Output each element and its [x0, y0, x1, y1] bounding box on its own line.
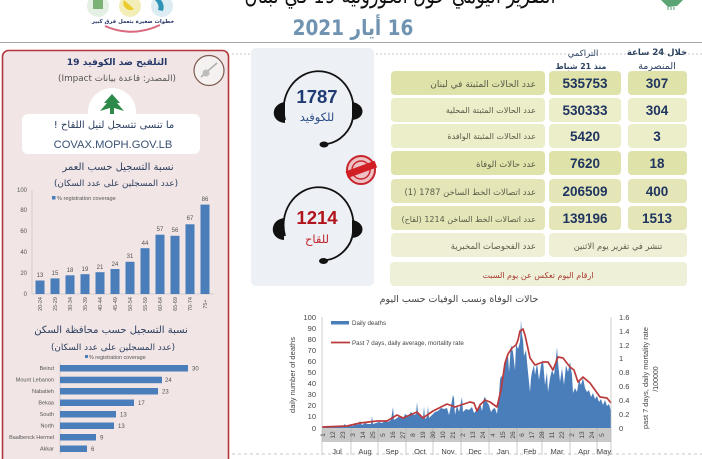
axes: 90 [308, 324, 316, 333]
table row: hotline 1214 calls: 1513 [642, 211, 673, 226]
bar chart: registration by age: 18 [67, 268, 74, 274]
axes: 10 [308, 412, 316, 421]
date tick labels [320, 431, 606, 439]
bar chart: registration by governorate: Bekaa [38, 400, 55, 406]
month labels: Dec [468, 447, 482, 456]
bar chart: registration by governorate: 17 [138, 401, 145, 407]
table row: local cases: عدد الحالات المثبتة المحلية [446, 105, 536, 115]
heading: age chart [54, 162, 178, 189]
campaign logos [87, 0, 174, 32]
bar chart: registration by age: 70-74 [188, 297, 194, 311]
axes: 20 [308, 401, 316, 410]
axes: daily number of deaths [288, 337, 297, 413]
axes: 40 [308, 379, 316, 388]
panel: vaccination [2, 50, 228, 459]
bar chart: registration by age: 86 [202, 197, 209, 203]
month labels: Oct [414, 447, 427, 456]
axes: 1.4 [619, 327, 629, 336]
bar chart: registration by age: 67 [187, 216, 194, 222]
month labels: Apr [578, 447, 590, 456]
note: saturday figures [390, 262, 687, 286]
table row: imported cases: 5420 [570, 129, 600, 144]
icon: syringe badge [194, 56, 224, 86]
bar chart: registration by governorate: 24 [165, 378, 172, 384]
date tick labels: 10 [440, 431, 447, 439]
date tick labels: 2 [569, 433, 576, 437]
icon: vaccine hotline headset: للقاح [305, 232, 329, 246]
icon: ministry logo top right [661, 0, 683, 10]
table row: lab tests [391, 233, 687, 257]
bar chart: registration by governorate: Mount Lebanon [16, 378, 54, 384]
bar chart: registration by age: 40-44 [98, 297, 104, 311]
table headers: المنصرمة [638, 61, 676, 72]
bar chart: registration by governorate: 13 [118, 424, 125, 430]
bar chart: registration by age: 20 [20, 271, 28, 277]
table headers: خلال 24 ساعة [627, 48, 687, 58]
table row: imported cases [391, 124, 687, 148]
bar chart: registration by age: 31 [127, 254, 134, 260]
heading: age chart: (عدد المسجلين على عدد السكان) [54, 179, 178, 189]
date tick labels: 8 [410, 433, 417, 437]
axes: 0.6 [619, 382, 629, 391]
table row: hotline 1787 calls [391, 179, 687, 203]
month labels: Aug [358, 447, 372, 456]
source note: (المصدر: قاعدة بيانات Impact) [58, 74, 176, 84]
month labels: Mar [551, 447, 564, 456]
axes: 30 [308, 390, 316, 399]
date tick labels: 11 [549, 431, 556, 438]
campaign logos: خطوات صغيرة بتعمل فرق كبير [91, 18, 174, 25]
table row: local cases: 304 [646, 103, 669, 118]
bar chart: registration by governorate: 13 [120, 412, 127, 418]
axes: 0 [619, 424, 623, 433]
bar chart: registration by age: 50-54 [128, 297, 134, 311]
bar chart: registration by age [17, 188, 214, 311]
legend [331, 320, 464, 347]
icon: covid hotline headset: للكوفيد [300, 110, 334, 125]
table row: confirmed cases: 307 [646, 76, 668, 91]
table headers [556, 48, 687, 72]
icon: vaccine hotline headset: 1214 [296, 207, 338, 228]
bar chart: registration by age: 56 [172, 228, 179, 234]
date tick labels: 17 [529, 431, 536, 439]
axes: 0.8 [619, 368, 629, 377]
area: daily deaths [322, 320, 611, 428]
table row: hotline 1214 calls: عدد اتصالات الخط الساخن 1214 (لقاح) [401, 215, 536, 224]
bar chart: registration by governorate: % registration coverage [89, 355, 146, 361]
month labels: Jan [497, 447, 509, 456]
date tick labels: 13 [579, 431, 586, 439]
date tick labels: 5 [380, 433, 387, 437]
date tick labels: 23 [340, 431, 347, 439]
month labels: Nov [441, 447, 455, 456]
date tick labels: 26 [510, 431, 517, 439]
bar chart: registration by age: 40 [20, 250, 28, 256]
registration callout [22, 114, 200, 154]
bar chart: registration by age: 65-69 [173, 297, 179, 311]
table row: deaths [391, 151, 687, 175]
table row: confirmed cases [391, 71, 687, 95]
heading: age chart: نسبة التسجيل حسب العمر [61, 162, 174, 173]
registration callout: COVAX.MOPH.GOV.LB [54, 139, 172, 151]
heading: governorate chart: نسبة التسجيل حسب محافظة السكن [34, 325, 188, 336]
legend: Past 7 days, daily average, mortality rate [352, 340, 464, 347]
legend: Daily deaths [352, 320, 386, 327]
date tick labels: 25 [370, 431, 377, 439]
date band [322, 428, 611, 455]
axes: past 7 days, daily mortality rate [641, 327, 650, 429]
bar chart: registration by age: 20-24 [38, 297, 44, 311]
icon: covid hotline headset: 1787 [296, 86, 338, 107]
table row: imported cases: 3 [653, 129, 661, 144]
bar chart: registration by governorate: Beirut [40, 366, 54, 372]
bar chart: registration by age: 24 [112, 262, 119, 268]
axes: 1.6 [619, 313, 629, 322]
axes: 0.2 [619, 410, 629, 419]
registration callout: ما تنسى تتسجل لنيل اللقاح ! [54, 120, 174, 131]
date tick labels: 15 [500, 431, 507, 439]
icon: free stamp [346, 156, 377, 184]
bar chart: registration by age: 25-29 [53, 297, 59, 311]
table row: hotline 1787 calls: 400 [646, 184, 668, 199]
bar chart: registration by age: 55-59 [143, 297, 149, 311]
bar chart: registration by governorate: South [40, 412, 54, 418]
bar chart: registration by governorate: Baalbenck Hermel [9, 435, 54, 441]
chart title: حالات الوفاة ونسب الوفيات حسب اليوم [380, 294, 538, 305]
axes: 1.2 [619, 341, 629, 350]
date tick labels: 5 [599, 433, 606, 437]
bar chart: registration by governorate: 6 [91, 447, 95, 453]
line: 7-day mortality rate [322, 329, 611, 427]
axes: 1 [619, 354, 623, 363]
month labels: May [597, 447, 611, 456]
heading: governorate chart [34, 325, 188, 353]
bar chart: registration by age: 0 [24, 292, 28, 298]
date tick labels: 16 [390, 431, 397, 439]
bar chart: registration by age: 21 [97, 265, 104, 271]
axes: 100 [303, 313, 316, 322]
icon: cedar logo [88, 88, 136, 136]
table row: confirmed cases: 535753 [562, 76, 608, 91]
bar chart: registration by governorate: Akkar [40, 446, 54, 452]
bar chart: registration by governorate: Nabatieh [32, 389, 54, 395]
bar chart: registration by age: 80 [20, 208, 28, 214]
axes: 0 [312, 424, 316, 433]
bar chart: registration by age: 75+ [203, 299, 209, 309]
date tick labels: 12 [330, 431, 337, 439]
bar chart: registration by age: 45-49 [113, 297, 119, 311]
table row: hotline 1214 calls: 139196 [562, 211, 608, 226]
table row: lab tests: تنشر في تقرير يوم الاثنين [574, 241, 663, 251]
chart: daily deaths and mortality rate [288, 313, 660, 456]
date tick labels: 24 [589, 431, 596, 439]
bar chart: registration by age: 30-34 [68, 297, 74, 311]
table headers: التراكمي [568, 49, 598, 59]
bar chart: registration by age: 19 [82, 267, 89, 273]
date tick labels: 4 [490, 433, 497, 437]
axes [288, 313, 660, 433]
note: saturday figures: ارقام اليوم تعكس عن يوم السبت [482, 271, 594, 280]
month labels: Feb [524, 447, 536, 456]
axes: 50 [308, 368, 316, 377]
bar chart: registration by governorate [9, 355, 199, 455]
month labels [332, 447, 611, 456]
date tick labels: 2 [460, 433, 467, 437]
panel title: التلقيح ضد الكوفيد 19 [67, 57, 167, 68]
bar chart: registration by age: 60-64 [158, 297, 164, 311]
table row: hotline 1214 calls [391, 206, 687, 230]
bar chart: registration by age: 60 [20, 229, 28, 235]
axes: 60 [308, 357, 316, 366]
bar chart: registration by governorate: North [41, 424, 54, 430]
date tick labels: 14 [360, 431, 367, 439]
table row: lab tests: عدد الفحوصات المخبرية [451, 242, 536, 252]
heading: governorate chart: (عدد المسجلين على عدد السكان) [51, 343, 175, 353]
table row: deaths: 18 [649, 156, 665, 171]
bar chart: registration by governorate: 23 [162, 390, 169, 396]
table row: local cases [391, 98, 687, 122]
table row: hotline 1787 calls: عدد اتصالات الخط الساخن 1787 (1) [405, 187, 536, 197]
date tick labels: 28 [539, 431, 546, 439]
date tick labels: 21 [450, 431, 457, 439]
bar chart: registration by age: 44 [142, 241, 149, 247]
axes: /100000 [653, 366, 660, 392]
table headers: منذ 21 شباط [556, 62, 607, 71]
date tick labels: 6 [519, 433, 526, 437]
date tick labels: 3 [350, 433, 357, 437]
bar chart: registration by age: 35-39 [83, 297, 89, 311]
date tick labels: 30 [430, 431, 437, 439]
date tick labels: 22 [559, 431, 566, 439]
bar chart: registration by governorate: 9 [100, 436, 104, 442]
panel: hotlines [251, 48, 377, 286]
table row: confirmed cases: عدد الحالات المثبتة في لبنان [430, 80, 536, 90]
bar chart: registration by age: 15 [52, 271, 59, 277]
icon: covid hotline headset [274, 71, 362, 148]
bar chart: registration by age: 13 [37, 273, 44, 279]
date tick labels: 1 [320, 433, 327, 437]
table row: imported cases: عدد الحالات المثبتة الوافدة [447, 132, 536, 141]
date tick labels: 19 [420, 431, 427, 439]
icon: vaccine hotline headset [273, 187, 362, 264]
date tick labels: 24 [480, 431, 487, 439]
month labels: Sep [385, 447, 399, 456]
month labels: Jul [332, 447, 342, 456]
table row: hotline 1787 calls: 206509 [562, 184, 608, 199]
axes: 0.4 [619, 396, 629, 405]
table row: deaths: عدد حالات الوفاة [476, 160, 536, 170]
date: 16 أيار 2021 [293, 13, 413, 40]
bar chart: registration by governorate: 30 [192, 366, 199, 372]
date tick labels: 27 [400, 431, 407, 439]
bar chart: registration by age: 100 [17, 188, 28, 194]
table row: local cases: 530333 [562, 103, 608, 118]
table row: deaths: 7620 [570, 156, 600, 171]
date tick labels: 13 [470, 431, 477, 439]
axes: 80 [308, 335, 316, 344]
bar chart: registration by age: 57 [157, 227, 164, 233]
bar chart: registration by age: % registration coverage [57, 196, 116, 202]
axes: 70 [308, 346, 316, 355]
